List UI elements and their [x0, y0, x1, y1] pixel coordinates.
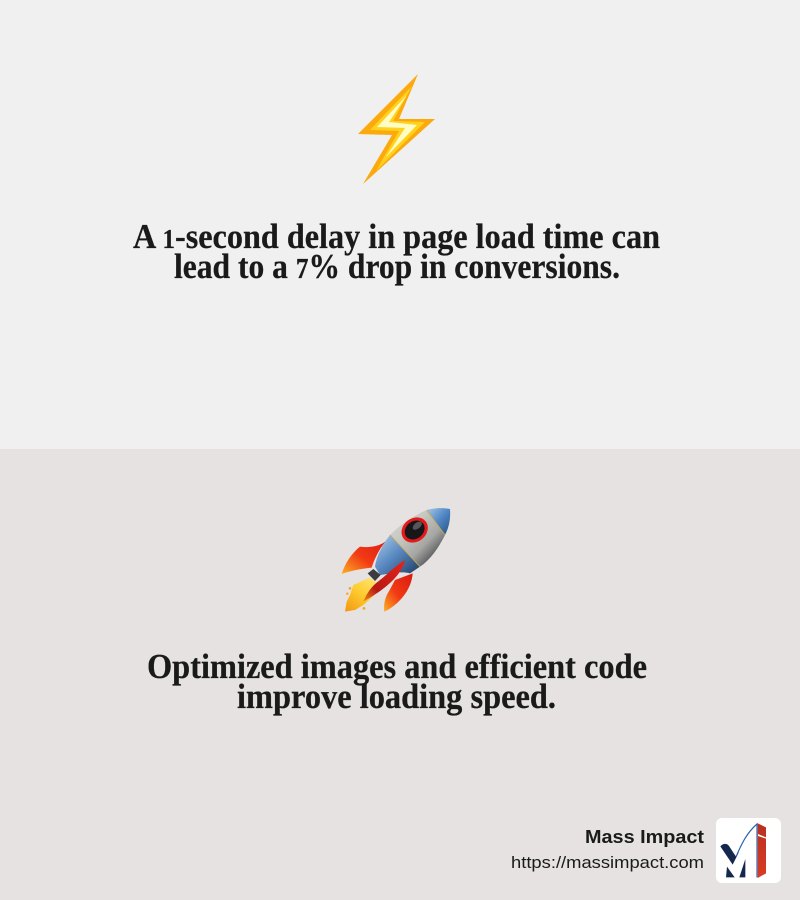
rocket window: [396, 512, 433, 548]
rocket left fin: [342, 538, 388, 574]
rocket centre fin: [363, 560, 405, 602]
rocket nozzle: [368, 569, 381, 581]
rocket lower body: [375, 535, 420, 575]
heading: page load statistic: [133, 217, 660, 286]
heading: page load statistic: lead to a 7% drop in conversions.: [174, 247, 620, 286]
heading: optimization statement: [147, 647, 647, 716]
icon: Mass Impact logo: [716, 818, 781, 883]
panel: bottom background: [0, 449, 800, 900]
heading: optimization statement: Optimized images and efficient code: [147, 647, 647, 686]
footer url: https://massimpact.com: [511, 853, 704, 872]
rocket band lines: [390, 510, 445, 567]
icon: lightning bolt: [358, 74, 435, 184]
rocket nose: [427, 508, 450, 535]
footer brand name: Mass Impact: [585, 827, 704, 847]
rocket flame sparks: [349, 587, 351, 590]
rocket flame: [345, 578, 387, 612]
heading: page load statistic: A 1-second delay in page load time can: [133, 217, 660, 256]
icon: rocket: [342, 508, 450, 612]
rocket right fin: [384, 573, 413, 612]
heading: optimization statement: improve loading speed.: [237, 677, 556, 716]
panel: top background: [0, 0, 800, 449]
rocket body: [390, 510, 445, 567]
